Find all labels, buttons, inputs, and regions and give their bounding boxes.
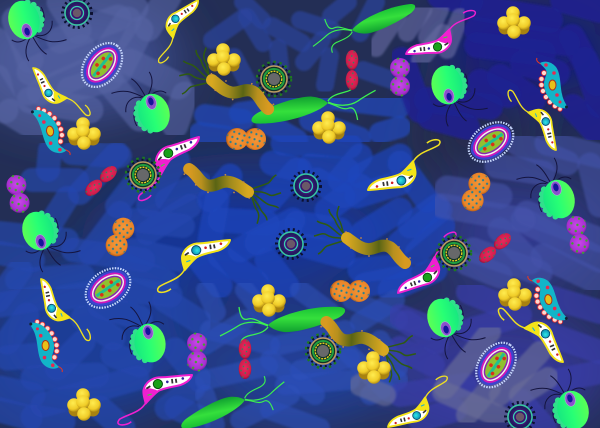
background bacilli: top-centre, dark tapered — [212, 2, 400, 87]
yellow trypanosome 3 — [498, 90, 566, 150]
green flagellated rod 4 — [175, 372, 290, 428]
yellow coccus cluster 7 — [498, 278, 532, 311]
background bacilli: right-middle, muted — [443, 143, 600, 283]
yellow trypanosome 4 — [157, 225, 230, 306]
ringed virus small 3 — [276, 230, 306, 258]
spiked oval cell 3 — [461, 114, 521, 170]
ringed virus large 2 — [126, 158, 160, 192]
spiked oval cell 1 — [74, 35, 130, 95]
background bacilli: centre, saturated blue — [200, 143, 443, 290]
background bacilli: bottom-right, indigo — [400, 292, 600, 428]
yellow trypanosome 8 — [388, 368, 448, 428]
yellow coccus cluster 1 — [207, 43, 241, 76]
ringed virus small 1 — [62, 0, 92, 28]
yellow coccus cluster 5 — [252, 284, 286, 317]
magenta trypanosome 1 — [406, 0, 476, 71]
green protozoan 4 — [17, 203, 83, 275]
orange diplococcus 1 — [226, 128, 266, 150]
yellow coccus cluster 2 — [312, 111, 346, 144]
magenta trypanosome 4 — [117, 358, 192, 428]
background bacilli: centre band above middle — [200, 100, 400, 140]
purple diplococcus 1 — [390, 58, 410, 96]
yellow coccus cluster 4 — [497, 6, 531, 39]
yellow trypanosome 2 — [151, 0, 206, 63]
green flagellated rod 1 — [309, 3, 421, 56]
background bacilli: top-left, muted — [0, 0, 185, 128]
background bacilli: top-right, grey — [376, 10, 460, 60]
ringed virus large 1 — [257, 62, 291, 96]
red diplobacillus 1 — [346, 50, 358, 90]
magenta trypanosome 3 — [398, 229, 456, 297]
green protozoan 3 — [427, 60, 490, 128]
olive spirillum 2 — [183, 166, 282, 226]
green protozoan 6 — [107, 300, 170, 368]
background bacilli: left-middle — [0, 150, 200, 282]
olive spirillum 3 — [314, 206, 411, 263]
red diplobacillus 4 — [239, 339, 251, 379]
yellow trypanosome 7 — [498, 308, 563, 362]
green protozoan 5 — [514, 155, 580, 227]
green protozoan 8 — [528, 366, 594, 428]
red diplobacillus 3 — [476, 230, 514, 266]
orange diplococcus 2 — [102, 214, 138, 260]
teal crescent 4 — [528, 270, 569, 328]
olive spirillum 1 — [177, 46, 278, 109]
teal crescent 3 — [29, 319, 62, 373]
green protozoan 2 — [109, 69, 175, 141]
ringed virus large 3 — [437, 236, 471, 270]
teal crescent 2 — [537, 58, 568, 111]
yellow coccus cluster 8 — [67, 388, 101, 421]
yellow trypanosome 5 — [368, 125, 441, 205]
yellow coccus cluster 3 — [67, 117, 101, 150]
red diplobacillus 2 — [82, 163, 120, 199]
ringed virus large 4 — [306, 334, 340, 368]
purple diplococcus 4 — [186, 332, 208, 372]
purple diplococcus 2 — [4, 173, 32, 215]
teal crescent 1 — [30, 103, 70, 160]
green flagellated rod 3 — [220, 307, 345, 347]
spiked oval cell 4 — [468, 335, 524, 395]
background bacilli: bottom-left — [0, 270, 200, 428]
background bacilli: bottom-centre, dense — [205, 290, 398, 428]
orange diplococcus 3 — [458, 169, 494, 215]
green protozoan 7 — [422, 290, 488, 362]
spiked oval cell 2 — [78, 260, 138, 316]
yellow coccus cluster 6 — [357, 351, 391, 384]
ringed virus small 2 — [292, 172, 320, 200]
background bacilli: top-right, indigo — [402, 0, 600, 133]
green protozoan 1 — [3, 0, 69, 64]
purple diplococcus 3 — [564, 214, 592, 256]
green flagellated rod 2 — [250, 79, 377, 124]
yellow trypanosome 6 — [31, 279, 100, 341]
ringed virus small 4 — [506, 402, 534, 428]
magenta trypanosome 2 — [138, 133, 199, 204]
yellow trypanosome 1 — [33, 68, 90, 116]
background bacilli: bottom-right, grey — [360, 332, 548, 418]
orange diplococcus 4 — [330, 280, 370, 302]
olive spirillum 4 — [318, 322, 417, 384]
